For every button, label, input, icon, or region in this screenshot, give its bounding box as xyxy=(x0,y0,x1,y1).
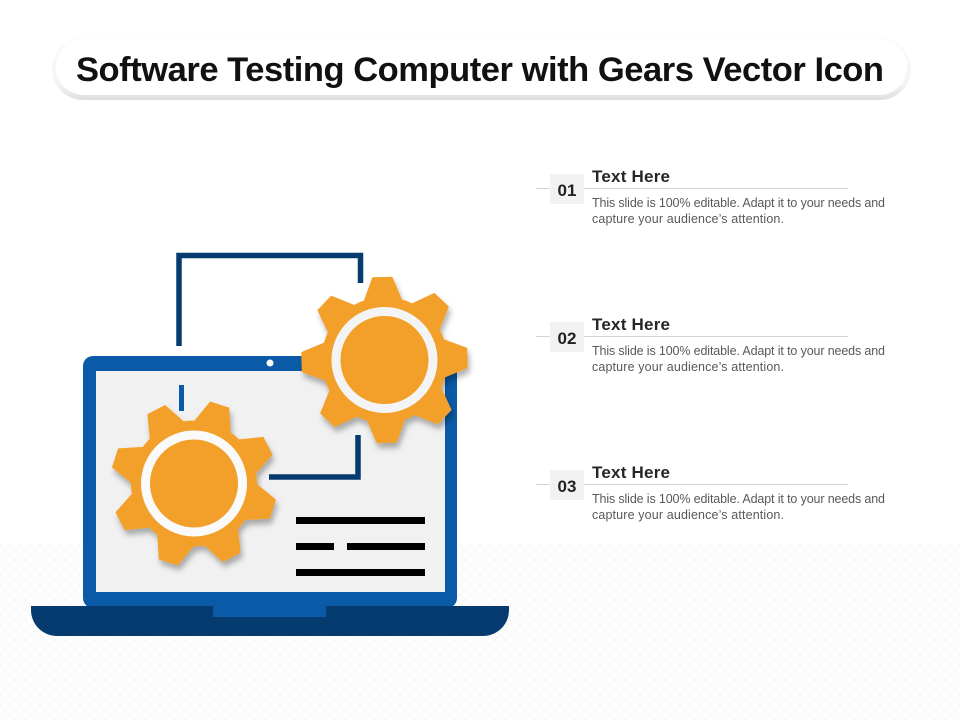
heading 02: Text Here xyxy=(592,315,670,334)
list item 03 xyxy=(536,463,885,522)
number badge 03 xyxy=(550,470,584,500)
laptop base xyxy=(31,606,509,636)
laptop screen frame xyxy=(83,356,457,608)
description 02: This slide is 100% editable. Adapt it to your needs and xyxy=(592,344,885,358)
title: Software Testing Computer with Gears Vector Icon xyxy=(76,51,884,89)
connector line: top bracket xyxy=(179,256,360,346)
list item 02 xyxy=(536,315,885,374)
number badge 02: 02 xyxy=(558,329,576,348)
screen text lines xyxy=(296,517,425,576)
description 01: capture your audience’s attention. xyxy=(592,212,784,226)
number badge 01: 01 xyxy=(558,181,576,200)
laptop illustration xyxy=(31,356,509,636)
number badge 02 xyxy=(550,322,584,352)
connector line: short stub above lower gear xyxy=(179,385,184,411)
laptop camera dot xyxy=(266,360,274,366)
icon: lower gear xyxy=(109,399,279,568)
description 02: capture your audience’s attention. xyxy=(592,360,784,374)
description 01: This slide is 100% editable. Adapt it to your needs and xyxy=(592,196,885,210)
number badge 01 xyxy=(550,174,584,204)
heading 01: Text Here xyxy=(592,167,670,186)
list item 01 xyxy=(536,167,885,226)
description 03: This slide is 100% editable. Adapt it to your needs and xyxy=(592,492,885,506)
heading 03: Text Here xyxy=(592,463,670,482)
laptop base notch xyxy=(213,606,326,617)
icon: upper gear xyxy=(299,275,470,445)
number badge 03: 03 xyxy=(558,477,576,496)
laptop screen display xyxy=(96,371,445,592)
description 03: capture your audience’s attention. xyxy=(592,508,784,522)
connector line: lower bracket xyxy=(269,435,358,477)
title banner xyxy=(52,38,911,100)
